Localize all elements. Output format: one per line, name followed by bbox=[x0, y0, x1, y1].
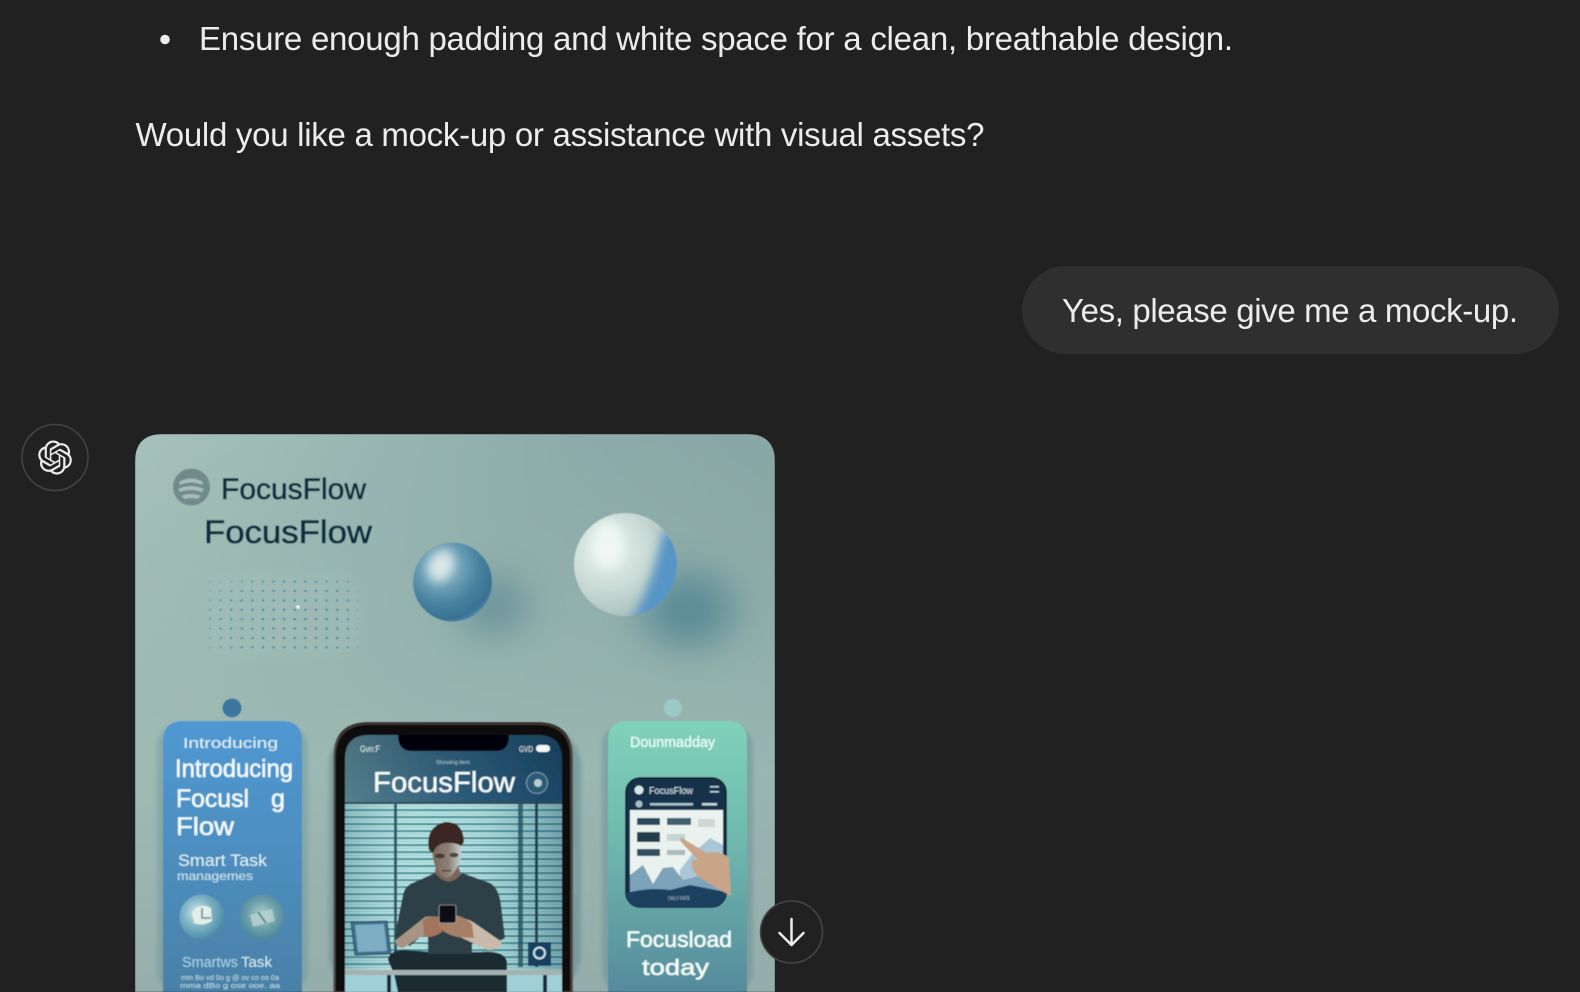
status bar right text bbox=[519, 744, 550, 754]
neck bbox=[434, 866, 462, 884]
mini list rows bbox=[637, 818, 715, 856]
badge on wall bbox=[528, 942, 551, 966]
card overline: Dounmadday bbox=[630, 734, 715, 751]
card feature label bbox=[182, 955, 272, 968]
facial shadows bbox=[435, 853, 458, 872]
assistant question: Would you like a mock-up or assistance with visual assets? bbox=[136, 116, 984, 153]
icon: pointing hand bbox=[680, 838, 731, 896]
panel: center phone bbox=[329, 722, 581, 992]
bullet point text: Ensure enough padding and white space for a clean, breathable design. bbox=[199, 20, 1233, 57]
card feature label: Smartws bbox=[182, 955, 238, 971]
legs bbox=[388, 950, 507, 992]
card feature label: Task bbox=[241, 955, 273, 971]
card fine print bbox=[180, 975, 280, 990]
status bar left text: Gvn:F bbox=[360, 744, 380, 755]
card heading: Focusl bbox=[176, 785, 249, 813]
blue sphere bbox=[413, 542, 526, 632]
panel: right teal card bbox=[602, 721, 753, 992]
call to action: today bbox=[642, 955, 710, 980]
card subheading: Smart Task bbox=[178, 852, 268, 870]
phone notch bbox=[398, 735, 509, 751]
table legs and floor bbox=[345, 975, 562, 992]
card heading: Introducing bbox=[175, 755, 293, 783]
panel: left blue card bbox=[157, 721, 308, 992]
shirt bbox=[396, 873, 505, 954]
icon: logo circle bbox=[173, 468, 210, 506]
handheld phone bbox=[439, 905, 456, 923]
card fine print: mma dBo g ose ooe. aa bbox=[180, 983, 280, 990]
mini footer: DAILY RATE bbox=[668, 896, 691, 902]
mini phone content bbox=[630, 810, 723, 895]
right forearm bbox=[438, 917, 502, 950]
left hand bbox=[423, 916, 442, 937]
right hand bbox=[438, 915, 474, 938]
blue dot bbox=[222, 698, 242, 718]
panel: generated mock-up image bbox=[135, 434, 775, 992]
hair bbox=[428, 822, 464, 853]
left forearm bbox=[394, 916, 432, 948]
mini phone bbox=[626, 778, 726, 907]
call to action: Focusload bbox=[626, 927, 732, 952]
white sphere bbox=[574, 513, 734, 646]
card subheading second line: managemes bbox=[177, 869, 253, 883]
call to action bbox=[626, 927, 732, 980]
small header text: Showing item bbox=[436, 760, 470, 766]
icon: assistant avatar bbox=[22, 424, 88, 490]
card heading: g bbox=[271, 785, 285, 813]
mini chart bbox=[626, 838, 726, 907]
status bar right text: GVD bbox=[519, 744, 533, 754]
phone title: FocusFlow bbox=[373, 767, 516, 799]
heading: FocusFlow second line: FocusFlow bbox=[204, 514, 373, 550]
face bbox=[432, 838, 462, 878]
card fine print: mm Bo vd 0o g @ ov co oo 0a bbox=[181, 975, 279, 982]
heading: FocusFlow: FocusFlow bbox=[221, 473, 366, 506]
icon: feature left bbox=[180, 894, 224, 940]
icon: feature right bbox=[240, 894, 284, 940]
phone screen bbox=[345, 735, 562, 992]
card overline: Introducing bbox=[183, 735, 278, 752]
icon: title badge bbox=[526, 772, 548, 794]
dot pattern bbox=[208, 580, 358, 649]
person bbox=[388, 822, 507, 992]
user message bubble: Yes, please give me a mock-up. bbox=[1062, 292, 1518, 329]
mini phone title: FocusFlow bbox=[649, 786, 694, 797]
laptop bbox=[351, 921, 391, 955]
mini phone toolbar bbox=[636, 800, 717, 808]
card heading: Flow bbox=[176, 813, 235, 841]
card heading bbox=[175, 755, 293, 841]
icon: scroll down button bbox=[760, 901, 822, 963]
phone side buttons bbox=[330, 794, 577, 906]
teal dot bbox=[664, 699, 682, 717]
user message bubble bbox=[1022, 266, 1559, 354]
table top bbox=[345, 970, 562, 975]
